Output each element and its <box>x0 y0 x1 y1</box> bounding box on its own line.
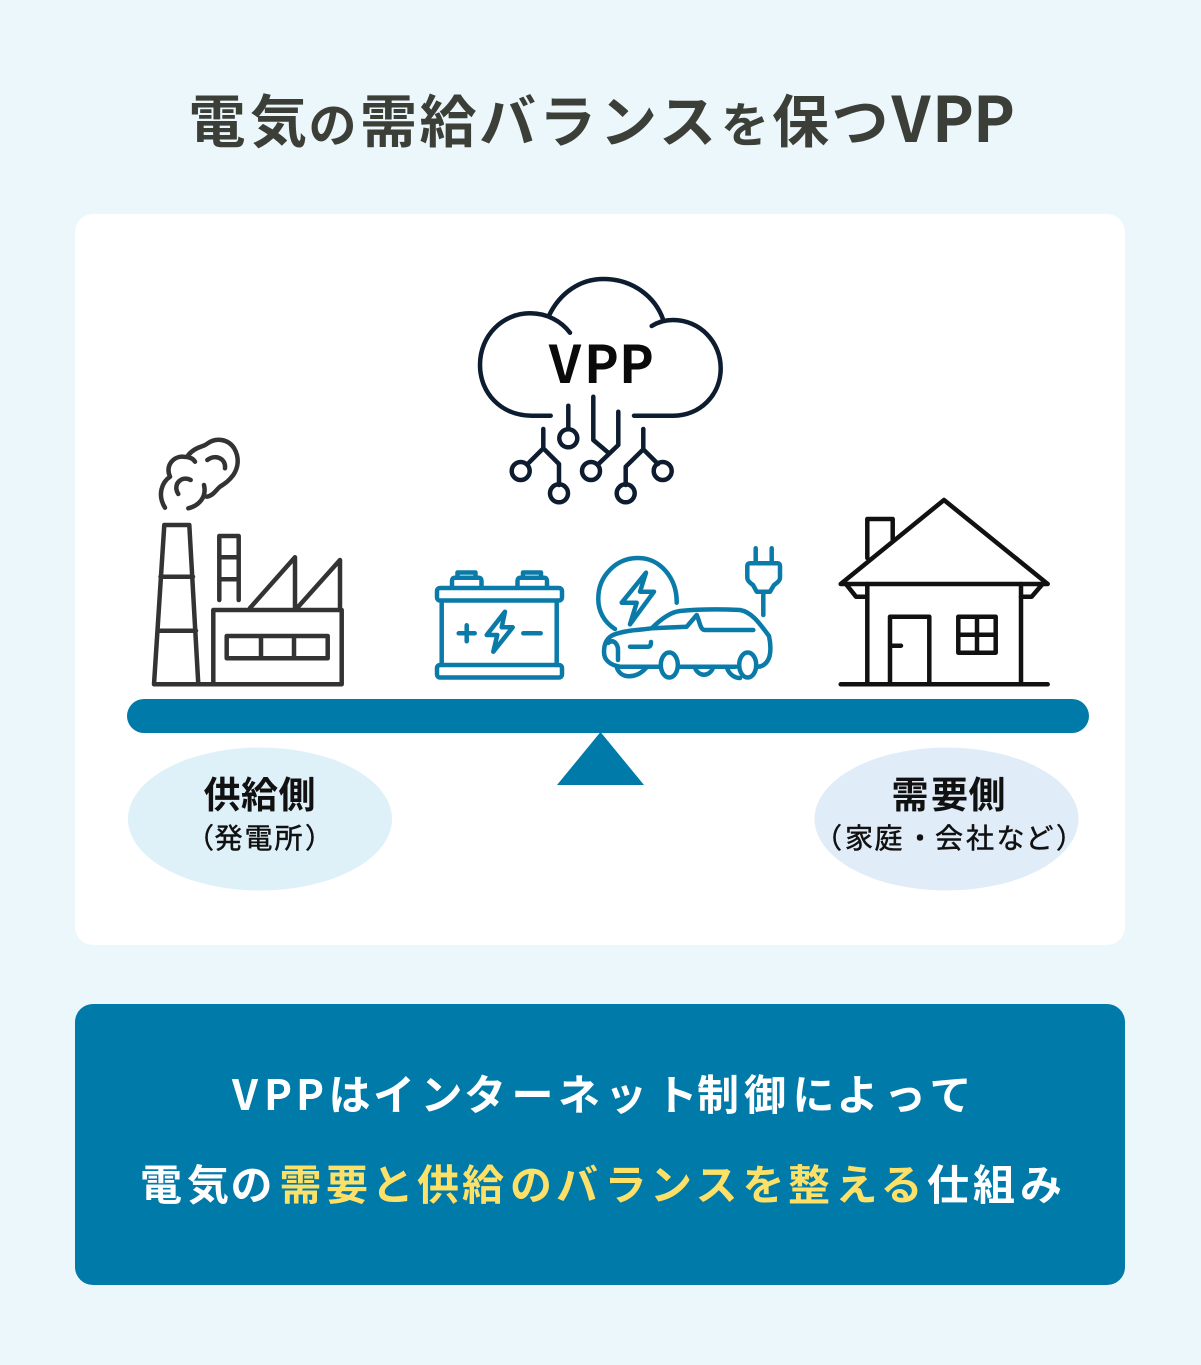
icon: electric car <box>598 548 780 678</box>
summary line 1: VPPはインターネット制御によって <box>231 1062 972 1123</box>
title: 電気 <box>188 77 307 159</box>
title: 需給バランス <box>360 77 716 159</box>
seesaw fulcrum <box>557 732 644 785</box>
summary line 2: 仕組み <box>927 1152 1062 1213</box>
title: を <box>721 86 769 156</box>
icon: factory <box>154 440 342 684</box>
icon: VPP cloud <box>480 279 721 502</box>
panel: summary <box>75 1004 1125 1285</box>
summary line 2: 電気の <box>140 1152 273 1213</box>
title: VPP <box>890 70 1015 161</box>
oval: demand side: 需要側 <box>892 765 1006 819</box>
icon: battery <box>437 572 562 678</box>
title: の <box>308 86 357 156</box>
oval: supply side <box>128 748 392 890</box>
title: 保つ <box>772 77 888 159</box>
title <box>188 70 1015 161</box>
VPP label: VPP <box>548 323 654 398</box>
oval: supply side: 供給側 <box>204 765 316 819</box>
oval: demand side: （家庭・会社など） <box>814 817 1084 857</box>
panel: balance diagram <box>75 214 1125 945</box>
oval: supply side: （発電所） <box>186 817 333 857</box>
oval: demand side <box>814 748 1084 890</box>
icon: house <box>841 500 1048 684</box>
summary line 2: 需要と供給のバランスを整える <box>279 1152 923 1213</box>
seesaw beam <box>127 699 1089 733</box>
